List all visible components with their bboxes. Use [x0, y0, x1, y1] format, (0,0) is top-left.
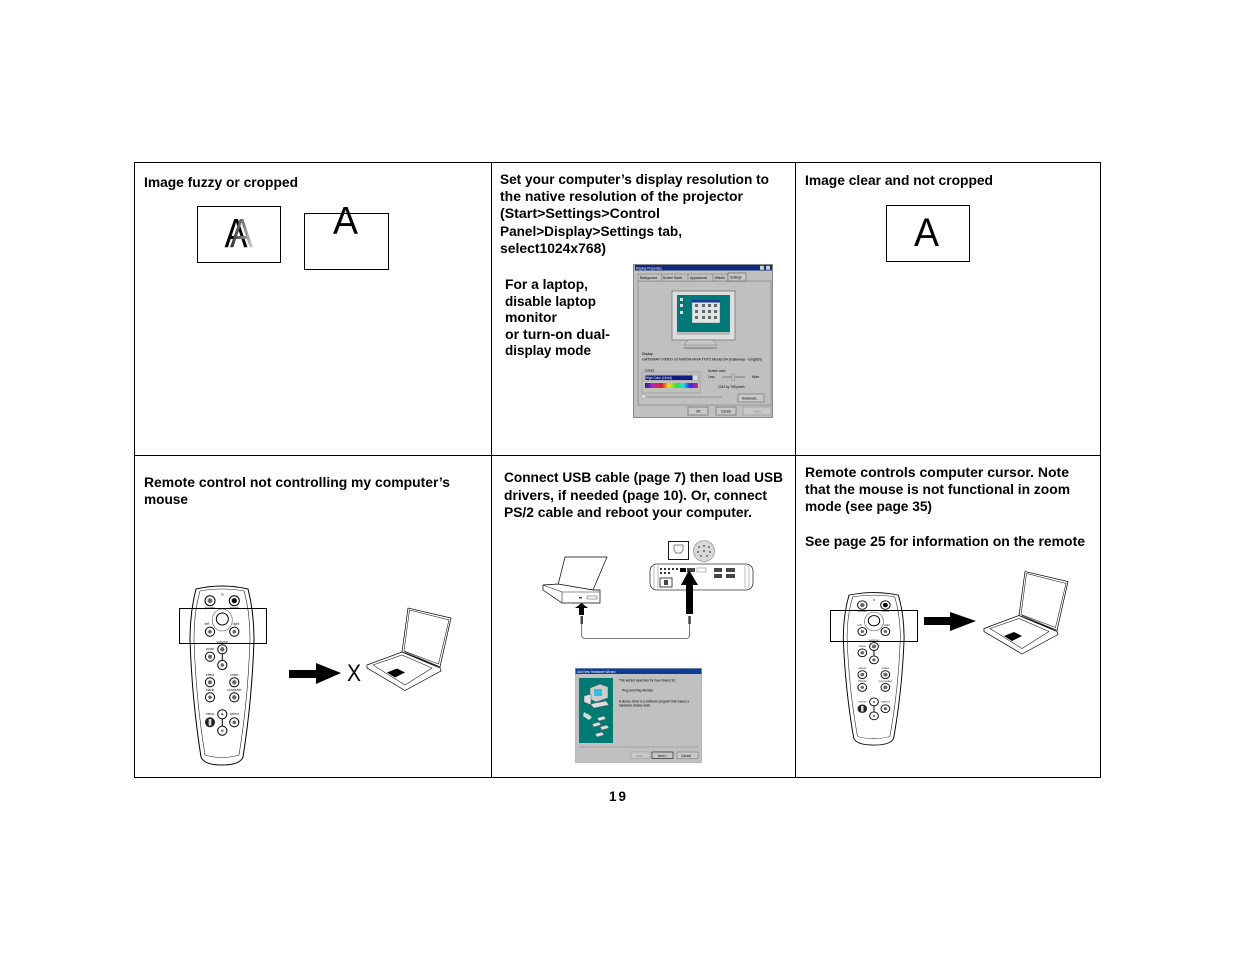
screenshot: display properties dialog: Apply — [753, 410, 761, 414]
diagram: USB connection — [543, 540, 753, 638]
text block: set display resolution: (Start>Settings>Control — [500, 206, 660, 221]
text block: connect USB cable — [504, 470, 783, 520]
screenshot: add new hardware wizard: Plug and Play Monitor — [622, 688, 654, 692]
screenshot: add new hardware wizard: Add New Hardware Wizard — [577, 670, 616, 674]
arrow: to laptop port — [575, 603, 588, 615]
screenshot: display properties dialog: Display: — [642, 352, 653, 356]
screenshot: display properties dialog: GATEWAY VX900 on NVIDIA RIVA TNT2 Model 64 (Gateway - English) — [642, 358, 762, 362]
text block: connect USB cable: Connect USB cable (page 7) then load USB — [504, 470, 783, 485]
text block: laptop note: display mode — [505, 343, 591, 358]
screenshot: display properties dialog: Settings — [730, 276, 742, 280]
icon: laptop left — [367, 608, 451, 690]
text block: laptop note: disable laptop — [505, 294, 596, 309]
screenshot: add new hardware wizard: Cancel — [681, 754, 691, 758]
icon: fuzzy letter box: A — [230, 210, 254, 256]
text block: remote controls computer cursor: Remote controls computer cursor. Note — [805, 465, 1069, 480]
text block: remote controls computer cursor: See page 25 for information on the remote — [805, 534, 1085, 549]
screenshot: add new hardware wizard — [576, 668, 702, 762]
icon: laptop rear — [543, 557, 607, 603]
heading: remote control not controlling mouse: Remote control not controlling my computer’s — [144, 475, 450, 490]
icon: projector rear — [650, 564, 753, 590]
screenshot: display properties dialog: Advanced... — [742, 396, 759, 400]
text block: laptop note: For a laptop, — [505, 277, 588, 292]
screenshot: display properties dialog: Screen Saver — [663, 276, 683, 280]
screenshot: display properties dialog: Less — [708, 375, 715, 379]
text block: set display resolution: Panel>Display>Settings tab, — [500, 224, 682, 239]
heading: remote control not controlling mouse: mouse — [144, 492, 188, 507]
screenshot: display properties dialog: Screen area — [708, 369, 726, 373]
text block: connect USB cable: drivers, if needed (page 10). Or, connect — [504, 488, 768, 503]
screenshot: add new hardware wizard: Next > — [658, 754, 667, 758]
screenshot: add new hardware wizard: This wizard searches for new drivers for: — [619, 678, 676, 682]
screenshot: display properties dialog: Colors — [645, 368, 655, 372]
icon: clear letter box: A — [914, 211, 939, 255]
screenshot: add new hardware wizard: A device driver is a software program that makes a — [619, 700, 689, 704]
panel: table grid — [134, 162, 1101, 778]
text block: set display resolution — [500, 172, 769, 256]
heading: image clear and not cropped: Image clear and not cropped — [805, 173, 993, 188]
text block: laptop note: or turn-on dual- — [505, 327, 610, 342]
screenshot: display properties dialog: More — [752, 375, 759, 379]
screenshot: display properties dialog — [634, 264, 772, 418]
arrow: remote to laptop working — [924, 612, 976, 631]
arrow: to projector port — [681, 570, 698, 614]
screenshot: display properties dialog: High Color (16 bit) — [646, 376, 672, 380]
screenshot: display properties dialog: Effects — [715, 276, 725, 280]
icon: fuzzy letter box — [198, 206, 280, 262]
heading: image fuzzy or cropped: Image fuzzy or cropped — [144, 175, 298, 190]
text block: laptop note: monitor — [505, 310, 558, 325]
icon: clear letter box — [886, 206, 970, 262]
text block: set display resolution: the native resolution of the projector — [500, 189, 744, 204]
icon: PS/2 connector — [694, 540, 714, 562]
text block: laptop note — [505, 277, 610, 358]
icon: X mark: X — [347, 660, 361, 687]
screenshot: display properties dialog: Background — [640, 276, 657, 280]
text block: set display resolution: Set your computer’s display resolution to — [500, 172, 769, 187]
screenshot: display properties dialog: OK — [696, 410, 701, 414]
screenshot: display properties dialog: Appearance — [690, 276, 707, 280]
heading: remote control not controlling mouse — [144, 475, 450, 507]
text block: remote controls computer cursor: that the mouse is not functional in zoom — [805, 482, 1070, 497]
page number: 19 — [609, 789, 626, 804]
text block: set display resolution: select1024x768) — [500, 241, 606, 256]
icon: cropped letter box — [304, 200, 388, 270]
text block: connect USB cable: PS/2 cable and reboot your computer. — [504, 505, 752, 520]
icon: USB connector — [668, 542, 688, 560]
illustration: remote control left — [180, 586, 266, 765]
text block: remote controls computer cursor — [805, 465, 1085, 549]
illustration: remote control right — [830, 593, 918, 745]
colour spectrum bar — [645, 383, 698, 388]
screenshot: add new hardware wizard: Back — [636, 754, 643, 758]
screenshot: display properties dialog: 1024 by 768 pixels — [718, 385, 745, 389]
screenshot: display properties dialog: Display Properties — [636, 266, 662, 270]
icon: laptop right — [984, 572, 1068, 654]
icon: cropped letter box: A — [333, 200, 358, 243]
screenshot: add new hardware wizard: hardware device work. — [619, 704, 651, 708]
arrow: remote to laptop crossed — [289, 663, 341, 684]
screenshot: display properties dialog: Cancel — [721, 410, 731, 414]
text block: remote controls computer cursor: mode (see page 35) — [805, 499, 932, 514]
cable — [582, 624, 690, 638]
icon: fuzzy letter box: A — [224, 210, 248, 256]
